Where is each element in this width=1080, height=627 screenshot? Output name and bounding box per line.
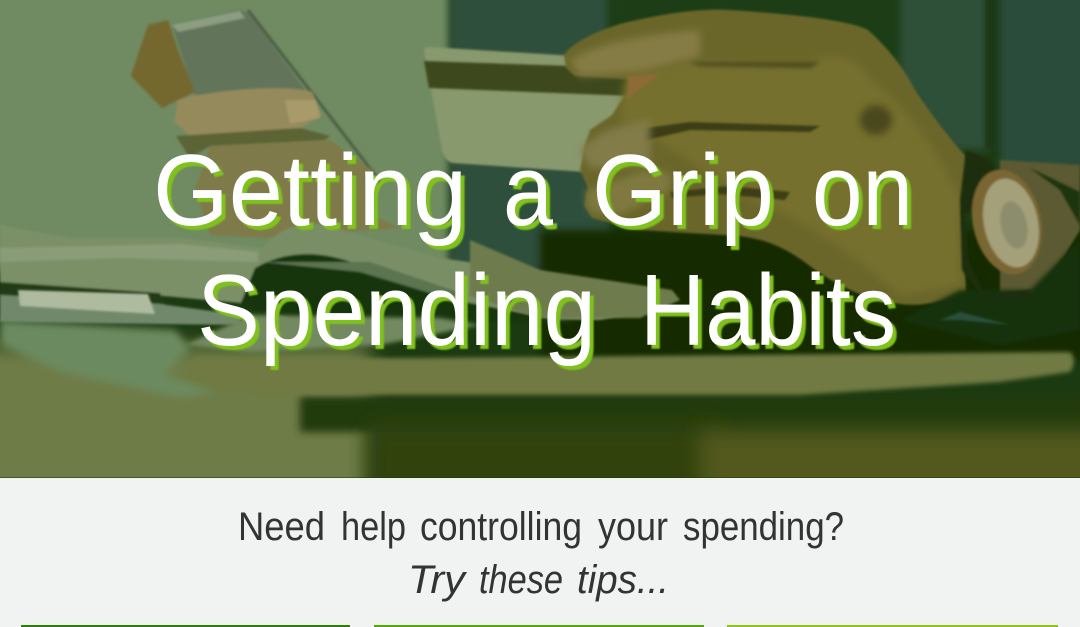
blurred pale object lower left	[0, 320, 215, 398]
title line 1: a	[503, 135, 554, 247]
tagline: tips...	[577, 558, 669, 602]
subheading: Need	[238, 505, 325, 549]
card magnetic stripe	[424, 61, 632, 96]
notebook	[0, 224, 640, 325]
title	[153, 135, 917, 371]
strap highlight on dark sleeve	[940, 312, 1010, 325]
tip column rule 2	[374, 625, 704, 627]
notebook right page corner	[470, 240, 680, 318]
title line 1	[153, 135, 917, 251]
phone in hand	[131, 10, 400, 238]
subheading: spending?	[683, 505, 844, 549]
dark hairline under photo	[0, 477, 1080, 478]
tagline	[408, 558, 669, 602]
tagline: Try	[408, 558, 468, 602]
subheading: controlling	[420, 505, 582, 549]
laptop edge	[180, 352, 1074, 395]
title line 1: on	[812, 135, 913, 247]
credit card	[424, 47, 640, 175]
title line 2: Habits	[644, 259, 900, 371]
subheading: your	[598, 505, 668, 549]
title line 1: Grip	[596, 139, 778, 251]
title line 2	[197, 255, 900, 371]
book lower pages	[185, 315, 480, 352]
title line 1: Getting	[157, 139, 471, 251]
notebook spiral binding	[18, 290, 155, 314]
subheading	[238, 505, 844, 549]
title line 1: on	[816, 139, 917, 251]
title line 1: Grip	[592, 135, 774, 247]
shirt cuff and sleeve	[900, 160, 1080, 345]
subheading: help	[341, 505, 406, 549]
title line 2: Spending	[197, 255, 596, 367]
title line 2: Spending	[201, 259, 600, 371]
tip column rule 3	[727, 625, 1058, 627]
tagline: these	[479, 558, 563, 602]
right hand	[564, 10, 973, 305]
title line 2: Habits	[640, 255, 896, 367]
wristwatch	[958, 150, 1042, 292]
title line 1: a	[507, 139, 558, 251]
title line 1: Getting	[153, 135, 467, 247]
tip column rule 1	[21, 625, 350, 627]
